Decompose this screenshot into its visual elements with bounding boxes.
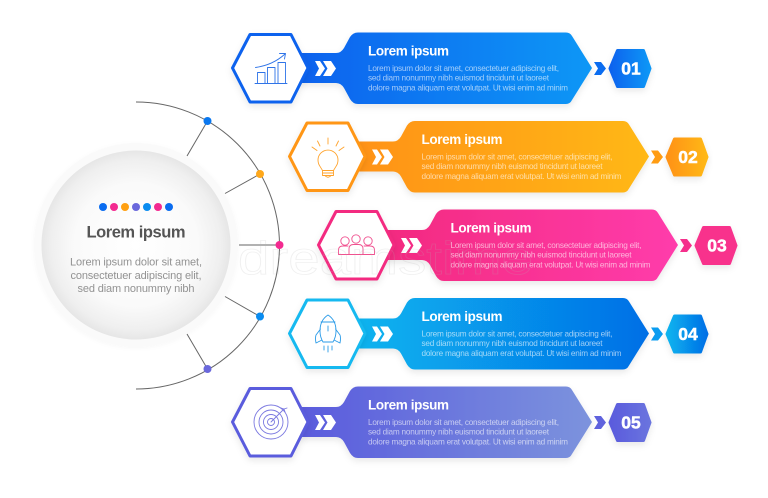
row 3 text: sed diam nonummy nibh euismod tincidunt ut laoreet xyxy=(450,251,632,260)
row 5 text xyxy=(368,418,568,446)
number 04: 04 xyxy=(678,324,698,344)
number hexagon 02 xyxy=(667,139,707,175)
row 2 text xyxy=(422,152,622,181)
number hexagon 03 xyxy=(696,228,736,264)
chevrons xyxy=(372,326,393,342)
row 5 text: sed diam nonummy nibh euismod tincidunt ut laoreet xyxy=(368,428,550,437)
row 2 text: sed diam nonummy nibh euismod tincidunt ut laoreet xyxy=(422,162,603,171)
row 3 text: Lorem ipsum dolor sit amet, consectetuer adipiscing elit, xyxy=(450,241,642,250)
icon: growth chart xyxy=(255,54,287,84)
row 4 text: Lorem ipsum dolor sit amet, consectetuer adipiscing elit, xyxy=(422,330,612,338)
chevrons xyxy=(315,415,336,430)
row 1 text xyxy=(368,64,568,92)
watermark: dreamstime xyxy=(238,232,533,284)
chevrons xyxy=(372,150,393,164)
row 5 hexagon xyxy=(232,388,308,456)
circle halo xyxy=(34,143,238,347)
row 2 title: Lorem ipsum xyxy=(422,132,502,147)
small arrow xyxy=(651,328,663,340)
row 1 xyxy=(232,32,650,104)
number 01: 01 xyxy=(621,58,641,78)
row 4 text: sed diam nonummy nibh euismod tincidunt ut laoreet xyxy=(422,339,603,348)
number hexagon 04 xyxy=(667,316,707,352)
row 5 bar xyxy=(300,386,592,458)
icon: rocket xyxy=(316,315,340,352)
row 1 hexagon xyxy=(232,34,308,102)
row 5 text: Lorem ipsum dolor sit amet, consectetuer adipiscing elit, xyxy=(368,418,559,427)
number 02: 02 xyxy=(678,147,698,167)
row 3 text: dolore magna aliquam erat volutpat. Ut wisi enim ad minim xyxy=(450,260,651,269)
icon: target xyxy=(254,405,288,439)
row 4 text xyxy=(422,330,622,358)
icon: people xyxy=(338,235,374,254)
row 3 text xyxy=(450,241,651,269)
row 1 text: Lorem ipsum dolor sit amet, consectetuer adipiscing elit, xyxy=(368,64,559,73)
row 4 xyxy=(290,298,707,370)
row 4 title: Lorem ipsum xyxy=(422,309,502,324)
chevrons xyxy=(315,61,336,76)
number 05: 05 xyxy=(621,412,641,432)
row 1 text: dolore magna aliquam erat volutpat. Ut wisi enim ad minim xyxy=(368,83,568,92)
small arrow xyxy=(594,62,606,75)
row 5 title: Lorem ipsum xyxy=(368,398,449,412)
number 03: 03 xyxy=(707,236,727,256)
number hexagon 01 xyxy=(610,50,650,86)
small arrow xyxy=(651,150,663,164)
row 1 text: sed diam nonummy nibh euismod tincidunt ut laoreet xyxy=(368,74,550,83)
row 4 text: dolore magna aliquam erat volutpat. Ut wisi enim ad minim xyxy=(422,349,622,358)
row 4 hexagon xyxy=(290,300,365,368)
center heading: Lorem ipsum xyxy=(86,224,186,242)
row 5 xyxy=(232,386,650,458)
center body text xyxy=(70,256,202,295)
colored dots row xyxy=(99,203,173,211)
arc with spokes and dots xyxy=(136,102,284,389)
small arrow xyxy=(594,416,606,429)
center body text: Lorem ipsum dolor sit amet, xyxy=(70,256,202,268)
row 4 bar xyxy=(357,298,649,370)
row 2 xyxy=(290,121,707,192)
center circle panel xyxy=(34,143,238,347)
row 3 bar xyxy=(386,210,678,281)
row 1 title: Lorem ipsum xyxy=(368,44,449,58)
center body text: consectetuer adipiscing elit, xyxy=(70,270,202,282)
icon: light bulb xyxy=(312,138,344,177)
row 3 title: Lorem ipsum xyxy=(450,220,532,236)
row 2 bar xyxy=(357,121,649,192)
chevrons xyxy=(401,238,422,253)
row 3 hexagon xyxy=(318,212,394,279)
row 2 text: dolore magna aliquam erat volutpat. Ut wisi enim ad minim xyxy=(422,172,622,181)
row 3 xyxy=(318,210,736,281)
number hexagon 05 xyxy=(610,404,650,440)
circle disc xyxy=(42,150,230,340)
row 2 text: Lorem ipsum dolor sit amet, consectetuer adipiscing elit, xyxy=(422,152,612,162)
row 5 text: dolore magna aliquam erat volutpat. Ut wisi enim ad minim xyxy=(368,437,568,446)
row 2 hexagon xyxy=(290,123,365,190)
center body text: sed diam nonummy nibh xyxy=(78,283,194,295)
row 1 bar xyxy=(300,32,592,104)
small arrow xyxy=(680,239,692,252)
